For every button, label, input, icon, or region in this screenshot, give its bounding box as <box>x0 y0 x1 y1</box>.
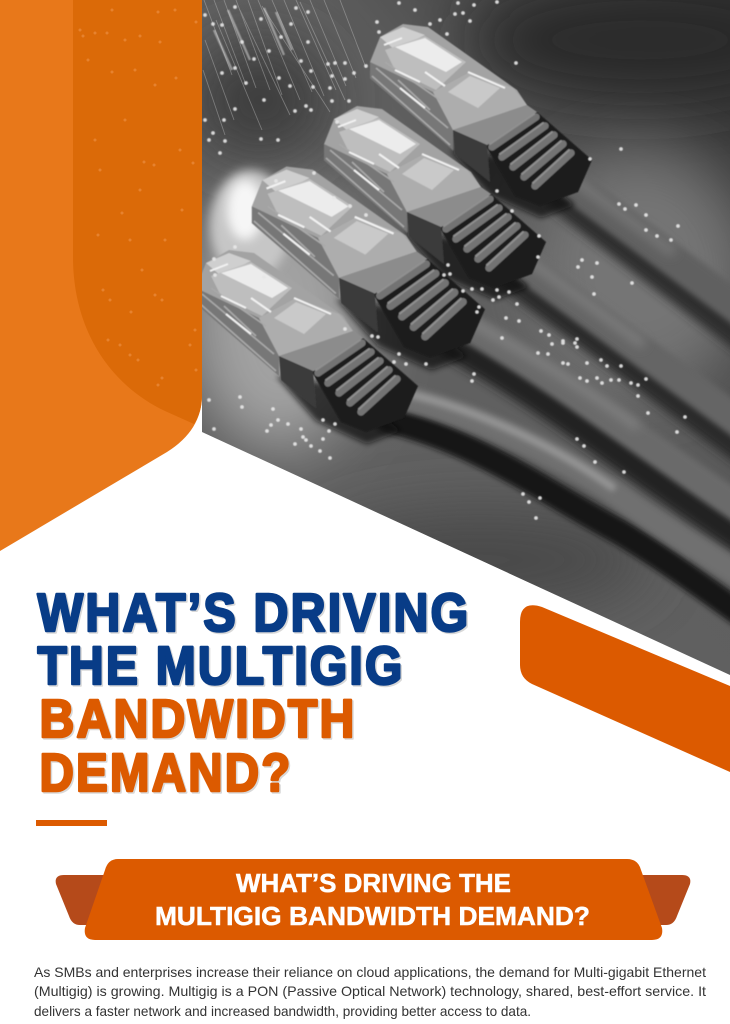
plug 1 <box>370 24 592 218</box>
body text: (Multigig) is growing. Multigig is a PON (Passive Optical Network) technology, shared, best-effort service. It <box>34 983 706 999</box>
title shadow: WHAT’S DRIVING <box>39 584 472 644</box>
banner ribbon left <box>56 875 110 925</box>
section banner <box>56 859 690 940</box>
title shadow: DEMAND? <box>41 744 294 804</box>
plug 4 <box>196 250 418 444</box>
fiber optic strands <box>203 0 366 135</box>
cable 1 <box>562 180 730 356</box>
cable 4 <box>388 393 730 642</box>
title line 3: BANDWIDTH <box>40 689 356 749</box>
plug 3 <box>252 166 485 370</box>
title line 4: DEMAND? <box>40 743 292 803</box>
banner text <box>155 868 590 931</box>
body text <box>34 964 706 1019</box>
faint dots on orange <box>80 10 196 385</box>
title line 1: WHAT’S DRIVING <box>38 583 470 643</box>
decorative orange parallelogram <box>520 605 730 772</box>
title line 2: THE MULTIGIG <box>38 636 404 696</box>
body text: As SMBs and enterprises increase their reliance on cloud applications, the demand for Multi-gigabit Ethernet <box>34 964 706 980</box>
title shadow: BANDWIDTH <box>41 690 358 750</box>
cable 3 <box>452 320 730 564</box>
banner text: WHAT’S DRIVING THE <box>236 868 511 898</box>
body text: delivers a faster network and increased bandwidth, providing better access to data. <box>34 1003 531 1019</box>
plug 2 <box>324 106 546 300</box>
title underline <box>36 820 107 826</box>
title shadow: THE MULTIGIG <box>39 638 406 698</box>
banner text: MULTIGIG BANDWIDTH DEMAND? <box>155 901 590 931</box>
darker orange overlay <box>73 0 202 424</box>
title shadow <box>39 584 472 804</box>
sparkles <box>205 2 685 518</box>
banner body <box>85 859 662 940</box>
cable 2 <box>512 258 730 476</box>
panel: orange corner shape <box>0 0 202 551</box>
banner ribbon right <box>636 875 690 925</box>
title <box>38 583 472 804</box>
panel: network cables photo <box>190 0 730 680</box>
